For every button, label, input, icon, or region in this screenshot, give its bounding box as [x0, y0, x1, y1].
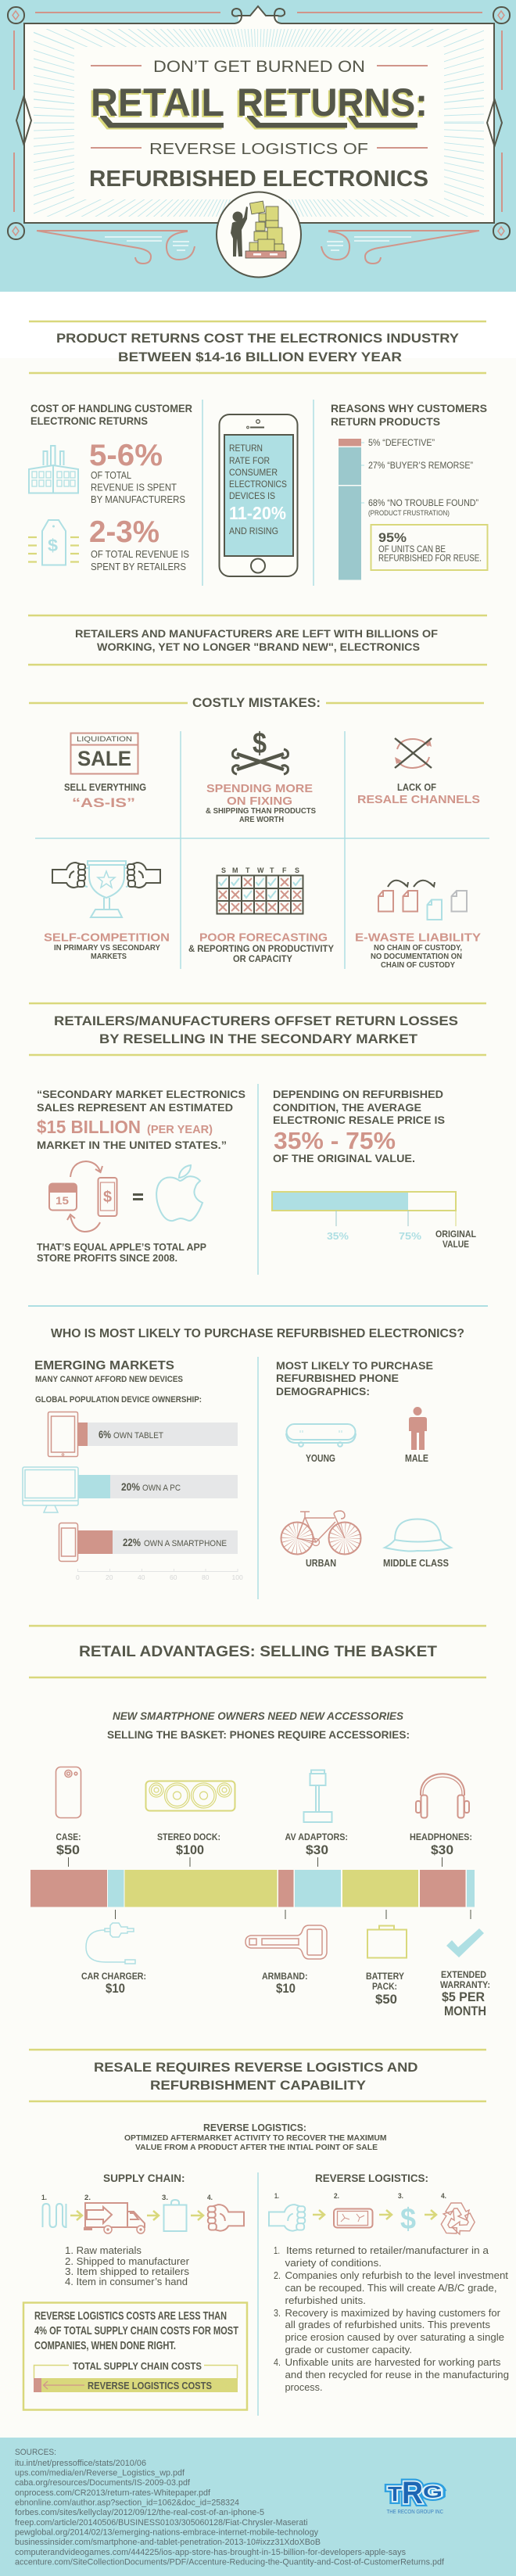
diagram: supply chain steps: 1. [41, 2194, 47, 2202]
list: reverse logistics steps: price erosion caused by over saturating a single [285, 2332, 504, 2343]
icon: stereo dock [145, 1781, 235, 1811]
bar: resale value range: ORIGINAL [435, 1229, 476, 1240]
sources: onprocess.com/CR2013/return-rates-Whitepaper.pdf [15, 2488, 211, 2498]
labels: accessories below bar: CAR CHARGER: [81, 1972, 146, 1982]
callout: reverse logistics under 4%: REVERSE LOGISTICS COSTS [88, 2380, 212, 2391]
sources: pewglobal.org/2014/02/13/emerging-nations-embrace-internet-mobile-technology [15, 2528, 318, 2537]
callout: 95%: OF UNITS CAN BE [378, 545, 446, 554]
mistake: poor forecasting: & REPORTING ON PRODUCTIVITY [188, 943, 334, 954]
title: REFURBISHED ELECTRONICS [89, 167, 428, 192]
list: reverse logistics steps: variety of conditions. [285, 2258, 382, 2269]
phone: return rate: ELECTRONICS [229, 479, 287, 490]
mistake: e-waste liability: NO CHAIN OF CUSTODY, [374, 943, 462, 953]
bar chart: device ownership: 80 [202, 1573, 210, 1581]
caption: app store profits [37, 1241, 206, 1264]
stat: 5-6%: BY MANUFACTURERS [91, 493, 185, 505]
list: reverse logistics steps: process. [285, 2382, 322, 2393]
resale price text: DEPENDING ON REFURBISHED [273, 1088, 443, 1100]
mistake: spending more on fixing: SPENDING MORE [206, 782, 313, 795]
mistake: poor forecasting: POOR FORECASTING [199, 931, 328, 945]
labels: accessories above bar: $50 [56, 1842, 80, 1857]
labels: accessories above bar: AV ADAPTORS: [285, 1833, 348, 1842]
labels: accessories below bar: MONTH [444, 2004, 486, 2018]
section heading: resale requires reverse logistics [29, 2050, 486, 2101]
labels: accessories above bar: $30 [306, 1842, 328, 1857]
list: supply chain steps: 3. Item shipped to retailers [65, 2266, 189, 2277]
list: supply chain steps: 2. Shipped to manufacturer [65, 2256, 189, 2267]
mistake: spending more on fixing: ARE WORTH [239, 815, 284, 824]
ornamental frame [8, 6, 510, 264]
icon: calendar grid: S [221, 866, 226, 874]
mistake: sell as-is [64, 734, 146, 810]
panel: demographics [276, 1359, 451, 1569]
list: supply chain steps: 1. Raw materials [65, 2245, 142, 2256]
diagram: reverse logistics steps: $ [400, 2203, 416, 2236]
mistake: self-competition: IN PRIMARY VS SECONDARY [54, 943, 160, 953]
sources: freep.com/article/20140506/BUSINESS0103/305060128/Fiat-Chrysler-Maserati [15, 2518, 308, 2528]
icon: calendar, phone equals apple: $ [103, 1189, 112, 1206]
panel: reverse logistics [269, 2172, 509, 2393]
sources: forbes.com/sites/kellyclay/2012/09/12/the-real-cost-of-an-iphone-5 [15, 2508, 264, 2517]
heading: emerging markets: GLOBAL POPULATION DEVICE OWNERSHIP: [35, 1395, 202, 1405]
phone: return rate: RATE FOR [229, 455, 270, 466]
bar: resale value range [272, 1192, 476, 1250]
mistake: lack of resale channels: LACK OF [397, 782, 436, 793]
labels: accessories above bar [56, 1833, 472, 1919]
bar: resale value range: 35% [327, 1230, 349, 1242]
bar chart: device ownership: 40 [138, 1573, 145, 1581]
bar: resale value range: VALUE [443, 1239, 469, 1250]
heading: demographics: DEMOGRAPHICS: [276, 1385, 370, 1397]
icon: liquidation sale sign: SALE [77, 747, 131, 770]
definition: reverse logistics: OPTIMIZED AFTERMARKET ACTIVITY TO RECOVER THE MAXIMUM [124, 2133, 387, 2143]
icon: calendar, phone equals apple [49, 1161, 202, 1232]
stacked bar: reasons: 5% “DEFECTIVE” [368, 439, 435, 448]
list: reverse logistics steps: can be recouped. This will create A/B/C grade, [285, 2283, 497, 2294]
stat: 5-6%: 5-6% [89, 439, 163, 472]
subheading: accessories: NEW SMARTPHONE OWNERS NEED NEW ACCESSORIES [113, 1710, 404, 1722]
icon: av adaptor [303, 1771, 331, 1822]
title: RETURNS: [235, 82, 427, 126]
callout: reverse logistics under 4%: REVERSE LOGISTICS COSTS ARE LESS THAN [34, 2309, 227, 2323]
quote text: $15 BILLION [37, 1117, 141, 1137]
icon: armband [245, 1925, 327, 1959]
stat: 5-6%: REVENUE IS SPENT [91, 482, 177, 493]
bar: accessory basket [30, 1870, 475, 1907]
mistake: lack of resale channels: RESALE CHANNELS [357, 793, 480, 806]
labels: accessories below bar: EXTENDED [441, 1971, 486, 1980]
heading: demographics: MOST LIKELY TO PURCHASE [276, 1359, 433, 1372]
mistake: lack of resale channels [357, 738, 480, 806]
stat: 2-3%: SPENT BY RETAILERS [91, 561, 186, 572]
logo: TRG: G [423, 2482, 443, 2502]
resale price text: ELECTRONIC RESALE PRICE IS [273, 1114, 445, 1126]
stat: 2-3%: 2-3% [89, 515, 159, 549]
statement: billions of working electronics [28, 615, 487, 665]
stacked bar: reasons: 68% “NO TROUBLE FOUND” [368, 499, 478, 508]
section heading: offset return losses: RETAILERS/MANUFACTURERS OFFSET RETURN LOSSES [54, 1014, 458, 1028]
logo: TRG: R [402, 2476, 423, 2510]
sources: SOURCES: [15, 2448, 56, 2457]
mistake: sell as-is: SELL EVERYTHING [64, 782, 146, 793]
logo: TRG: T [388, 2482, 402, 2506]
resale price text: CONDITION, THE AVERAGE [273, 1101, 421, 1114]
icon: calendar grid: S [295, 866, 299, 874]
mistake: e-waste liability: NO DOCUMENTATION ON [371, 952, 462, 961]
bar chart: device ownership: OWN A PC [142, 1484, 181, 1493]
resale price text: OF THE ORIGINAL VALUE. [273, 1152, 415, 1164]
list: reverse logistics steps: 4. [274, 2357, 281, 2368]
mistake: spending more on fixing [206, 727, 316, 824]
panel: resale price [272, 1088, 476, 1250]
sources: itu.int/net/pressoffice/stats/2010/06 [15, 2459, 146, 2468]
labels: accessories below bar: BATTERY [366, 1972, 404, 1982]
icon: calendar, phone equals apple: 15 [56, 1194, 69, 1207]
bar: resale value range: 75% [399, 1230, 421, 1242]
section heading: who is most likely: WHO IS MOST LIKELY TO PURCHASE REFURBISHED ELECTRONICS? [51, 1327, 464, 1340]
heading: supply chain: SUPPLY CHAIN: [103, 2172, 185, 2184]
bar chart: device ownership: 6% [99, 1428, 111, 1440]
title: RETURNS: [237, 81, 428, 124]
heading: reasons: REASONS WHY CUSTOMERS [331, 402, 487, 414]
sources: computerandvideogames.com/444225/ios-app-store-has-brought-in-15-billion-for-developers-apple-says [15, 2548, 406, 2557]
diagram: supply chain steps: 3. [162, 2194, 168, 2202]
heading: cost of handling: ELECTRONIC RETURNS [30, 414, 148, 427]
illustration: worker stacking boxes [217, 192, 301, 277]
statement: billions of working electronics: WORKING, YET NO LONGER "BRAND NEW", ELECTRONICS [97, 640, 420, 653]
title [89, 58, 428, 192]
icon: dollar and crossed wrenches [233, 727, 288, 774]
icon: price tag [28, 520, 79, 565]
label: male: MALE [405, 1453, 428, 1464]
phone: return rate: 11-20% [229, 503, 286, 523]
quote text: MARKET IN THE UNITED STATES.” [37, 1139, 227, 1151]
label: young: YOUNG [306, 1453, 335, 1464]
statement: billions of working electronics: RETAILERS AND MANUFACTURERS ARE LEFT WITH BILLIONS OF [75, 627, 438, 640]
bar chart: device ownership: 0 [76, 1573, 80, 1581]
icon: battery pack [367, 1925, 407, 1958]
bar chart: device ownership [23, 1412, 243, 1581]
logo: TRG [386, 2476, 443, 2515]
panel: supply chain [23, 2172, 247, 2410]
labels: accessories below bar: $10 [276, 1981, 296, 1996]
list: reverse logistics steps: and then recycled for reuse in the manufacturing [285, 2370, 509, 2380]
labels: accessories above bar: $30 [431, 1842, 453, 1857]
heading: reverse logistics: REVERSE LOGISTICS: [315, 2172, 428, 2184]
stacked bar: reasons [339, 439, 478, 580]
logo: TRG: THE RECON GROUP INC [386, 2508, 443, 2515]
panel: reasons customers return [331, 402, 488, 580]
subheading: accessories [107, 1710, 410, 1741]
icon: trophy and fists [52, 861, 160, 917]
title: REVERSE LOGISTICS OF [149, 141, 368, 158]
list: reverse logistics steps: grade or customer capacity. [285, 2345, 412, 2355]
heading: demographics [276, 1359, 433, 1397]
quote text: SALES REPRESENT AN ESTIMATED [37, 1101, 233, 1114]
diagram: reverse logistics steps: 2. [334, 2192, 339, 2201]
quote text [37, 1088, 245, 1151]
definition: reverse logistics: REVERSE LOGISTICS: [203, 2122, 306, 2133]
icon: calendar grid: T [245, 866, 250, 874]
heading: costly mistakes: COSTLY MISTAKES: [192, 695, 321, 710]
callout: 95% [371, 525, 488, 570]
labels: accessories above bar: CASE: [56, 1833, 81, 1842]
callout: reverse logistics under 4% [23, 2302, 247, 2410]
phone: return rate: DEVICES IS [229, 490, 275, 501]
bar chart: device ownership: 22% [123, 1536, 141, 1548]
stat: 5-6%: OF TOTAL [91, 469, 131, 481]
section heading: retail advantages: RETAIL ADVANTAGES: SELLING THE BASKET [79, 1644, 437, 1660]
labels: accessories above bar: HEADPHONES: [410, 1833, 472, 1842]
footer band [0, 2438, 516, 2576]
diagram: reverse logistics steps: 1. [274, 2192, 279, 2201]
section heading: offset return losses: BY RESELLING IN THE SECONDARY MARKET [99, 1031, 418, 1046]
callout: reverse logistics under 4%: TOTAL SUPPLY CHAIN COSTS [73, 2360, 202, 2372]
list: reverse logistics steps: Recovery is maximized by having customers for [285, 2308, 500, 2319]
resale price text [273, 1088, 445, 1164]
sources: caba.org/resources/Documents/IS-2009-03.pdf [15, 2478, 191, 2488]
sources: accenture.com/SiteCollectionDocuments/PDF/Accenture-Reducing-the-Quantity-and-Cost-of-CustomerReturns.pdf [15, 2557, 445, 2567]
list: reverse logistics steps: 3. [274, 2308, 281, 2319]
icon: hat [385, 1519, 451, 1552]
logo: TRG: G [423, 2482, 443, 2502]
mistake: poor forecasting [188, 866, 334, 964]
title: RETAIL [89, 82, 222, 126]
stat: 2-3%: OF TOTAL REVENUE IS [91, 548, 189, 560]
definition: reverse logistics [124, 2122, 387, 2152]
mistake: e-waste liability: CHAIN OF CUSTODY [381, 960, 455, 970]
sources: ups.com/media/en/Reverse_Logistics_wp.pdf [15, 2468, 185, 2477]
heading: emerging markets: EMERGING MARKETS [34, 1359, 174, 1372]
title: DON’T GET BURNED ON [153, 58, 365, 76]
labels: accessories below bar: ARMBAND: [262, 1972, 308, 1982]
bar chart: device ownership: 100 [231, 1573, 243, 1581]
definition: reverse logistics: VALUE FROM A PRODUCT AFTER THE INTIAL POINT OF SALE [135, 2143, 378, 2152]
subheading: accessories: SELLING THE BASKET: PHONES REQUIRE ACCESSORIES: [107, 1728, 410, 1741]
heading: reasons [331, 402, 487, 428]
stat: 5-6% [89, 439, 185, 505]
icon: calendar grid [217, 866, 303, 913]
labels: accessories below bar: $5 PER [442, 1989, 485, 2004]
icon: phone case [56, 1767, 81, 1817]
sources: businessinsider.com/smartphone-and-tablet-penetration-2013-10#ixzz31XdoXBoB [15, 2538, 321, 2547]
icon: calendar grid: M [232, 866, 238, 874]
section heading: retail advantages [29, 1626, 486, 1677]
list: reverse logistics steps: Items returned to retailer/manufacturer in a [286, 2245, 489, 2256]
mistake: self-competition: SELF-COMPETITION [44, 931, 170, 945]
mistake: self-competition: MARKETS [91, 952, 127, 961]
icon: factory [29, 446, 78, 493]
callout: reverse logistics under 4%: 4% OF TOTAL SUPPLY CHAIN COSTS FOR MOST [34, 2324, 238, 2337]
labels: accessories above bar: $100 [176, 1842, 204, 1857]
bar chart: device ownership: OWN TABLET [113, 1431, 163, 1440]
list: reverse logistics steps: Unfixable units are harvested for working parts [285, 2357, 500, 2368]
labels: accessories below bar: PACK: [372, 1982, 397, 1992]
list: supply chain steps: 4. Item in consumer’s hand [65, 2276, 188, 2287]
section heading: product returns cost: PRODUCT RETURNS COST THE ELECTRONICS INDUSTRY [56, 331, 460, 346]
panel: cost of handling [28, 402, 192, 572]
stacked bar: reasons: 27% “BUYER’S REMORSE” [368, 461, 473, 471]
section heading: product returns cost: BETWEEN $14-16 BILLION EVERY YEAR [118, 350, 402, 364]
labels: urban and middle class: MIDDLE CLASS [383, 1558, 449, 1569]
diagram: supply chain steps: 2. [84, 2194, 91, 2202]
mistake: e-waste liability [355, 881, 481, 970]
list: reverse logistics steps: 1. [274, 2245, 280, 2256]
phone: return rate [219, 414, 297, 576]
heading: cost of handling [30, 402, 192, 427]
section heading: product returns cost [29, 321, 486, 373]
heading: emerging markets: MANY CANNOT AFFORD NEW DEVICES [35, 1375, 183, 1384]
phone: return rate: CONSUMER [229, 467, 278, 478]
icon: check mark [446, 1928, 484, 1957]
stat: 2-3% [89, 515, 189, 572]
diagram: reverse logistics steps: 3. [398, 2192, 403, 2201]
mistake: spending more on fixing: & SHIPPING THAN PRODUCTS [206, 806, 316, 816]
labels: accessories above bar: STEREO DOCK: [157, 1833, 220, 1842]
icon: man [409, 1407, 427, 1450]
stacked bar: reasons: (PRODUCT FRUSTRATION) [368, 509, 450, 517]
mistake: spending more on fixing: ON FIXING [227, 795, 292, 808]
icon: calendar grid: T [270, 866, 274, 874]
caption: app store profits: THAT’S EQUAL APPLE’S TOTAL APP [37, 1241, 206, 1253]
icon: calendar grid: F [282, 866, 287, 874]
quote text: (PER YEAR) [147, 1123, 213, 1136]
bar chart: device ownership: 20% [121, 1480, 140, 1493]
icon: skateboard [286, 1424, 356, 1447]
icon: bicycle [281, 1511, 361, 1555]
diagram: supply chain steps [41, 2194, 244, 2233]
bar chart: device ownership: 20 [106, 1573, 113, 1581]
mistake: sell as-is: “AS-IS” [72, 795, 135, 810]
heading: cost of handling: COST OF HANDLING CUSTOMER [30, 402, 192, 414]
quote text: “SECONDARY MARKET ELECTRONICS [37, 1088, 245, 1100]
labels: urban and middle class: URBAN [306, 1558, 336, 1569]
resale price text: 35% - 75% [274, 1127, 396, 1154]
heading: demographics: REFURBISHED PHONE [276, 1372, 399, 1384]
section heading: resale requires reverse logistics: REFURBISHMENT CAPABILITY [150, 2078, 367, 2093]
panel: secondary market quote [37, 1088, 245, 1264]
phone: return rate: RETURN [229, 443, 263, 454]
heading: emerging markets [34, 1359, 202, 1405]
callout: 95%: 95% [378, 530, 407, 545]
bar chart: device ownership: OWN A SMARTPHONE [144, 1539, 227, 1548]
list: reverse logistics steps [274, 2245, 509, 2393]
icon: price tag: $ [48, 536, 58, 555]
icon: liquidation sale sign: LIQUIDATION [77, 735, 132, 744]
mistake: poor forecasting: OR CAPACITY [233, 953, 292, 964]
icon: headphones [416, 1774, 469, 1817]
icon: dollar and crossed wrenches: $ [253, 727, 267, 760]
section heading: offset return losses [29, 1003, 486, 1055]
callout: 95%: REFURBISHED FOR REUSE. [378, 554, 482, 563]
list: reverse logistics steps: Companies only refurbish to the level investment [285, 2270, 509, 2281]
labels: accessories below bar: $50 [375, 1992, 397, 2007]
labels: urban and middle class [306, 1558, 449, 1569]
list: supply chain steps [65, 2245, 189, 2287]
caption: app store profits: STORE PROFITS SINCE 2008. [37, 1252, 177, 1264]
title: RETAIL [91, 81, 224, 124]
labels: accessories below bar [81, 1971, 490, 2018]
icon: liquidation sale sign [70, 734, 138, 774]
header banner [0, 0, 516, 292]
logo: TRG: T [388, 2482, 402, 2506]
list: reverse logistics steps: all grades of refurbished units. This prevents [285, 2319, 490, 2330]
mistake: self-competition [44, 861, 170, 961]
icon: calendar grid: W [257, 866, 264, 874]
icon: car charger [86, 1923, 135, 1964]
bar chart: device ownership: 60 [170, 1573, 177, 1581]
phone: return rate: AND RISING [229, 526, 278, 536]
diagram: supply chain steps: 4. [207, 2194, 213, 2202]
icon: crossed-out cycle [395, 738, 432, 768]
list: reverse logistics steps: refurbished units. [285, 2295, 366, 2306]
labels: accessories below bar: $10 [106, 1981, 125, 1996]
logo: TRG: R [402, 2476, 423, 2510]
callout: reverse logistics under 4%: COMPANIES, WHEN DONE RIGHT. [34, 2339, 176, 2352]
labels: accessories below bar: WARRANTY: [440, 1981, 490, 1990]
sources [15, 2448, 445, 2567]
mistake: e-waste liability: E-WASTE LIABILITY [355, 931, 481, 945]
list: reverse logistics steps: 2. [274, 2270, 281, 2281]
sources: ebnonline.com/author.asp?section_id=1062&doc_id=258324 [15, 2498, 239, 2507]
diagram: reverse logistics steps: 4. [441, 2192, 446, 2201]
heading: reasons: RETURN PRODUCTS [331, 415, 440, 428]
section heading: resale requires reverse logistics: RESALE REQUIRES REVERSE LOGISTICS AND [94, 2060, 417, 2075]
icon: documents and arrows [378, 881, 467, 920]
panel: emerging markets [23, 1359, 243, 1581]
diagram: reverse logistics steps [269, 2192, 478, 2237]
